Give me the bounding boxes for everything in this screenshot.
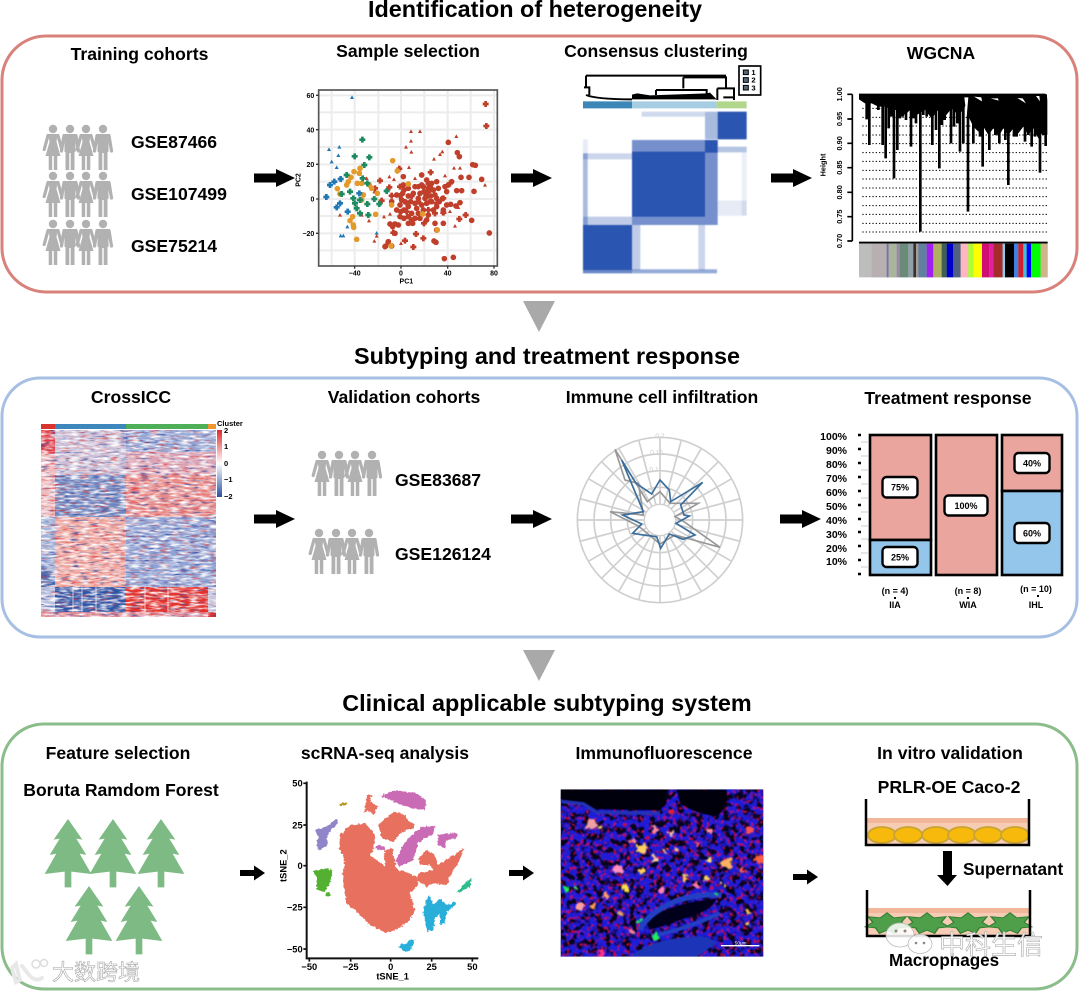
icon: grey down triangle [523,650,555,681]
chart: CrossICC heatmap [41,419,243,617]
chart: tSNE plot: −25 [343,962,359,972]
watermark: 大数跨境 [12,960,140,985]
chart: WGCNA dendrogram: 0.90 [835,136,844,150]
chart: treatment response stacked bars: 40% [1023,458,1041,468]
chart: treatment response stacked bars: 10% [826,556,848,568]
icon: macrophage culture well [865,890,1032,936]
panel: Identification of heterogeneity [2,36,1077,292]
chart: tSNE plot: 50 [467,962,478,972]
chart: treatment response stacked bars: (n = 4) [882,586,908,596]
chart: treatment response stacked bars: 80% [826,459,848,471]
chart: CrossICC heatmap: 2 [224,426,228,435]
heading: Boruta Ramdom Forest: Boruta Ramdom Forest [23,780,219,800]
heading: Training cohorts: Training cohorts [71,44,209,64]
colour scale [217,430,222,497]
chart: treatment response stacked bars [820,431,1062,610]
scatter plot: PCA: 20 [307,162,314,169]
panel: Subtyping and treatment response [2,378,1077,637]
chart: tSNE plot: tSNE_1 [376,971,409,981]
panel frame [2,378,1077,637]
chart: treatment response stacked bars: 100% [954,501,978,511]
scatter plot: PCA [296,90,498,285]
chart: treatment response stacked bars: WIA [959,600,977,610]
scatter plot: PCA: 40 [444,270,452,277]
heading: CrossICC: CrossICC [91,387,171,407]
chart: WGCNA dendrogram [818,87,1048,277]
label: GSE126124: GSE126124 [395,544,491,564]
chart: tSNE plot: 25 [292,820,303,830]
title: Subtyping and treatment response: Subtyping and treatment response [354,343,740,369]
image: immunofluorescence: 50μm [735,941,747,946]
chart: immune cell radar: 0.15 [650,450,663,457]
arrow [254,510,295,528]
cluster bar [583,101,747,108]
chart: tSNE plot: 0 [297,861,303,871]
image: immunofluorescence [561,789,765,958]
panel frame [2,36,1077,292]
icon: people row GSE107499 [44,172,112,217]
chart: treatment response stacked bars: (n = 8) [955,586,981,596]
chart: consensus clustering heatmap [583,66,761,273]
heading: Consensus clustering: Consensus clustering [564,41,748,61]
scatter plot: PCA: 80 [490,270,498,277]
chart: tSNE plot: −50 [301,962,317,972]
chart: treatment response stacked bars: 90% [826,445,848,457]
legend: 3 [751,83,756,92]
heading: PRLR-OE Caco-2: PRLR-OE Caco-2 [878,777,1021,797]
scatter plot: PCA: −40 [349,270,361,277]
watermark: 中科生信 [886,923,1043,960]
icon: grey down triangle [523,301,555,332]
icon: people row GSE87466 [44,125,112,170]
chart: treatment response stacked bars: 70% [826,473,848,485]
chart: CrossICC heatmap: −2 [224,492,233,501]
heading: Sample selection: Sample selection [336,41,480,61]
chart: immune cell radar: 0.2 [655,433,665,440]
chart: tSNE plot [278,779,478,981]
heading: In vitro validation: In vitro validation [877,743,1023,763]
label: Macrophages: Macrophages [889,951,999,970]
title: Clinical applicable subtyping system: Clinical applicable subtyping system [342,690,752,716]
scatter plot: PCA: −20 [302,231,314,238]
chart: treatment response stacked bars: 75% [891,482,909,492]
heading: WGCNA: WGCNA [907,43,975,63]
chart: tSNE plot: 25 [426,962,437,972]
chart: CrossICC heatmap: −1 [224,475,233,484]
chart: CrossICC heatmap: Cluster [217,419,243,428]
scatter plot: PCA: PC1 [400,278,413,285]
chart: WGCNA dendrogram: 1.00 [835,87,844,101]
watermark: 大数跨境: 大数跨境 [52,960,140,985]
chart: treatment response stacked bars: (n = 10) [1020,584,1052,594]
similarity matrix [583,112,747,273]
chart: treatment response stacked bars: IHL [1029,600,1044,610]
scatter plot: PCA: 0 [310,197,314,204]
label: Supernatant: Supernatant [963,859,1064,879]
icon: people row GSE83687 [313,451,380,496]
arrow [771,169,812,187]
dendrogram branches [859,94,1047,232]
dendrogram [584,76,734,100]
arrow [511,169,552,187]
chart: tSNE plot: tSNE_2 [278,849,288,882]
chart: CrossICC heatmap: 1 [224,442,228,451]
legend [739,66,761,95]
arrow [793,870,818,884]
arrow [511,510,552,528]
chart: treatment response stacked bars: 100% [820,431,848,443]
arrow: supernatant transfer [937,851,957,886]
chart: treatment response stacked bars: 20% [826,543,848,555]
chart: tSNE plot: −25 [287,903,303,913]
arrow [780,510,821,528]
watermark: 中科生信: 中科生信 [939,930,1043,960]
chart: treatment response stacked bars: 60% [1023,528,1041,538]
chart: immune cell radar [577,433,743,603]
label: GSE83687: GSE83687 [395,470,481,490]
legend: 2 [751,76,756,85]
scatter plot: PCA: 60 [307,93,314,100]
heading: scRNA-seq analysis: scRNA-seq analysis [301,743,469,763]
chart: WGCNA dendrogram: 0.95 [835,112,844,126]
icon: people row GSE75214 [44,220,112,265]
scatter plot: PCA: 40 [307,127,314,134]
heading: Immunofluorescence: Immunofluorescence [576,743,753,763]
chart: WGCNA dendrogram: 0.80 [835,185,844,199]
chart: WGCNA dendrogram: 0.70 [835,234,844,248]
label: GSE107499: GSE107499 [131,184,227,204]
heading: Immune cell infiltration: Immune cell infiltration [566,387,758,407]
chart: treatment response stacked bars: 40% [826,515,848,527]
chart: tSNE plot: 50 [292,779,303,789]
chart: immune cell radar: 0.1 [649,466,659,473]
chart: WGCNA dendrogram: Height [818,153,827,176]
arrow [254,169,295,187]
heading: Treatment response: Treatment response [864,388,1032,408]
chart: WGCNA dendrogram: 0.85 [835,161,844,175]
chart: tSNE plot: −50 [287,944,303,954]
heading: Validation cohorts: Validation cohorts [328,387,480,407]
chart: CrossICC heatmap: 0 [224,459,228,468]
icon: Caco-2 culture well [866,799,1029,845]
icon: forest of five trees [45,819,184,954]
chart: treatment response stacked bars: IIA [889,600,901,610]
bars IIA, WIA, IHL [870,435,1062,575]
module colour strip [859,244,1048,277]
chart: WGCNA dendrogram: 0.75 [835,210,844,224]
chart: treatment response stacked bars: 60% [826,487,848,499]
scatter plot: PCA: 0 [399,270,403,277]
arrow [509,866,534,880]
label: GSE75214: GSE75214 [131,236,217,256]
icon: people row GSE126124 [310,529,378,574]
chart: treatment response stacked bars: 50% [826,501,848,513]
chart: treatment response stacked bars: 25% [891,552,909,562]
chart: treatment response stacked bars: 30% [826,529,848,541]
legend: 1 [751,68,756,77]
label: GSE87466: GSE87466 [131,132,217,152]
heading: Feature selection: Feature selection [46,743,190,763]
chart: tSNE plot: 0 [388,962,393,972]
panel frame [2,724,1077,989]
panel: Clinical applicable subtyping system [2,724,1077,989]
arrow [240,866,265,880]
scatter plot: PCA: PC2 [296,173,303,187]
